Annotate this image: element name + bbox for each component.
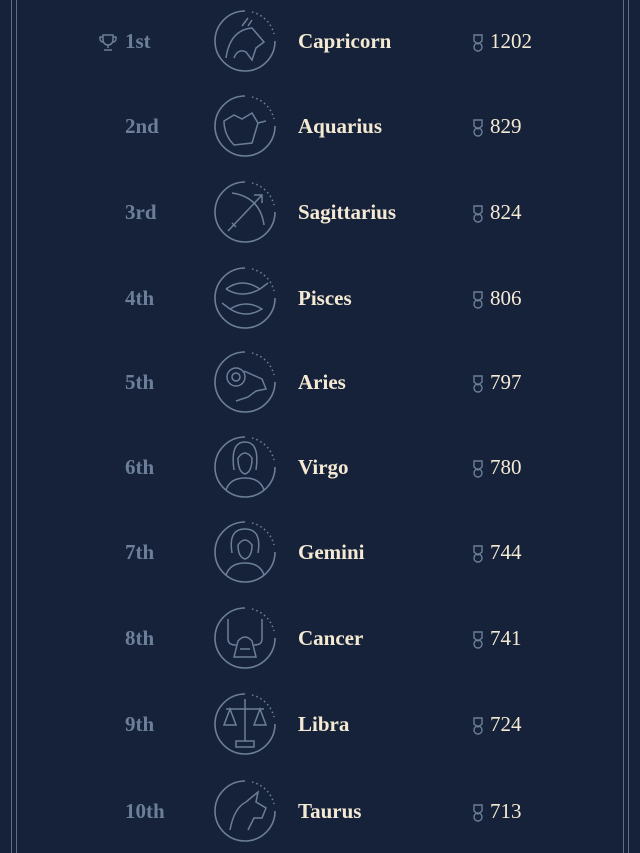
score: 713 [490, 799, 522, 823]
rank: 3rd [125, 200, 156, 224]
score [473, 540, 522, 564]
name: Gemini [298, 540, 364, 564]
rank: 1st [125, 29, 151, 53]
rank: 6th [125, 455, 154, 479]
row 9: Libra [125, 693, 522, 755]
name: Aries [298, 370, 346, 394]
score: 797 [490, 370, 522, 394]
name: Capricorn [298, 29, 391, 53]
row 10: Taurus [125, 780, 522, 842]
row 2: Aquarius [125, 95, 522, 157]
rank: 7th [125, 540, 154, 564]
score: 824 [490, 200, 522, 224]
rank: 2nd [125, 114, 159, 138]
row 1: Capricorn [99, 10, 532, 72]
score [473, 799, 522, 823]
score: 741 [490, 626, 522, 650]
icon: aquarius [214, 95, 276, 157]
name: Aquarius [298, 114, 382, 138]
icon: trophy [99, 34, 117, 51]
icon: virgo [214, 436, 276, 498]
row 6: Virgo [125, 436, 522, 498]
icon: cancer [214, 607, 276, 669]
score [473, 286, 522, 310]
icon: capricorn [214, 10, 276, 72]
row 4: Pisces [125, 267, 522, 329]
rank: 9th [125, 712, 154, 736]
rank: 8th [125, 626, 154, 650]
score: 806 [490, 286, 522, 310]
row 3: Sagittarius [125, 181, 522, 243]
name: Virgo [298, 455, 349, 479]
name: Sagittarius [298, 200, 396, 224]
score: 1202 [490, 29, 532, 53]
score: 780 [490, 455, 522, 479]
row 7: Gemini [125, 521, 522, 583]
name: Pisces [298, 286, 352, 310]
score [473, 200, 522, 224]
row 5: Aries [125, 351, 522, 413]
icon: gemini [214, 521, 276, 583]
rank: 5th [125, 370, 154, 394]
icon: pisces [214, 267, 276, 329]
name: Cancer [298, 626, 363, 650]
score [473, 626, 522, 650]
rank: 4th [125, 286, 154, 310]
score [473, 114, 522, 138]
icon: taurus [214, 780, 276, 842]
score: 744 [490, 540, 522, 564]
icon: sagittarius [214, 181, 276, 243]
score [473, 455, 522, 479]
name: Taurus [298, 799, 361, 823]
icon: libra [214, 693, 276, 755]
score: 829 [490, 114, 522, 138]
name: Libra [298, 712, 349, 736]
rank: 10th [125, 799, 165, 823]
score [473, 370, 522, 394]
score [473, 712, 522, 736]
icon: aries [214, 351, 276, 413]
row 8: Cancer [125, 607, 522, 669]
score: 724 [490, 712, 522, 736]
